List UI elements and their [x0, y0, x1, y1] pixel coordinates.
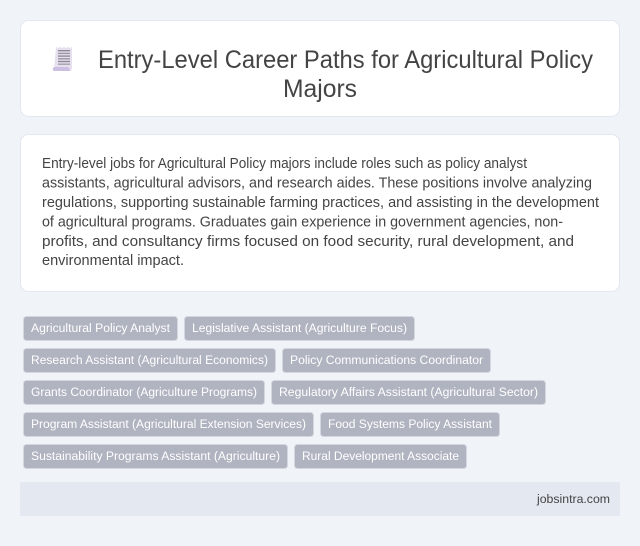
tag — [24, 412, 314, 436]
footer source text: jobsintra.com — [536, 492, 610, 506]
tag — [24, 316, 178, 340]
tag — [282, 348, 490, 372]
tag: Agricultural Policy Analyst — [31, 321, 171, 335]
title — [98, 46, 593, 103]
tag: Sustainability Programs Assistant (Agriculture) — [31, 449, 280, 463]
text block: description: Entry-level jobs for Agricultural Policy majors include roles such as policy analyst — [42, 156, 527, 172]
tag: Research Assistant (Agricultural Economics) — [31, 353, 268, 367]
panel: job tags — [24, 316, 546, 468]
tag — [24, 444, 288, 468]
text block: description: of agricultural programs. Graduates gain experience in government agencies, non- — [42, 214, 563, 230]
title: Majors — [283, 75, 357, 103]
tag — [24, 380, 264, 404]
panel: title card — [20, 20, 620, 116]
icon: document scroll — [53, 47, 72, 71]
tag — [272, 380, 546, 404]
tag — [184, 316, 414, 340]
tag: Rural Development Associate — [302, 449, 459, 463]
tag — [24, 348, 276, 372]
footer — [20, 482, 620, 516]
text block: description — [42, 156, 599, 269]
text block: description: environmental impact. — [42, 253, 184, 269]
text block: description: assistants, agricultural advisors, and research aides. These positions involve analyzing — [42, 176, 592, 192]
tag: Food Systems Policy Assistant — [328, 417, 493, 431]
tag — [320, 412, 500, 436]
tag: Program Assistant (Agricultural Extension Services) — [31, 417, 306, 431]
title: Entry-Level Career Paths for Agricultural Policy — [98, 46, 593, 74]
panel: description — [20, 134, 620, 292]
text block: description: regulations, supporting sustainable farming practices, and assisting in the development — [42, 195, 599, 211]
tag: Regulatory Affairs Assistant (Agricultural Sector) — [279, 385, 538, 399]
tag: Grants Coordinator (Agriculture Programs) — [31, 385, 257, 399]
tag: Policy Communications Coordinator — [290, 353, 483, 367]
text block: description: profits, and consultancy firms focused on food security, rural development, and — [42, 234, 574, 250]
tag — [294, 444, 466, 468]
tag: Legislative Assistant (Agriculture Focus) — [192, 321, 407, 335]
